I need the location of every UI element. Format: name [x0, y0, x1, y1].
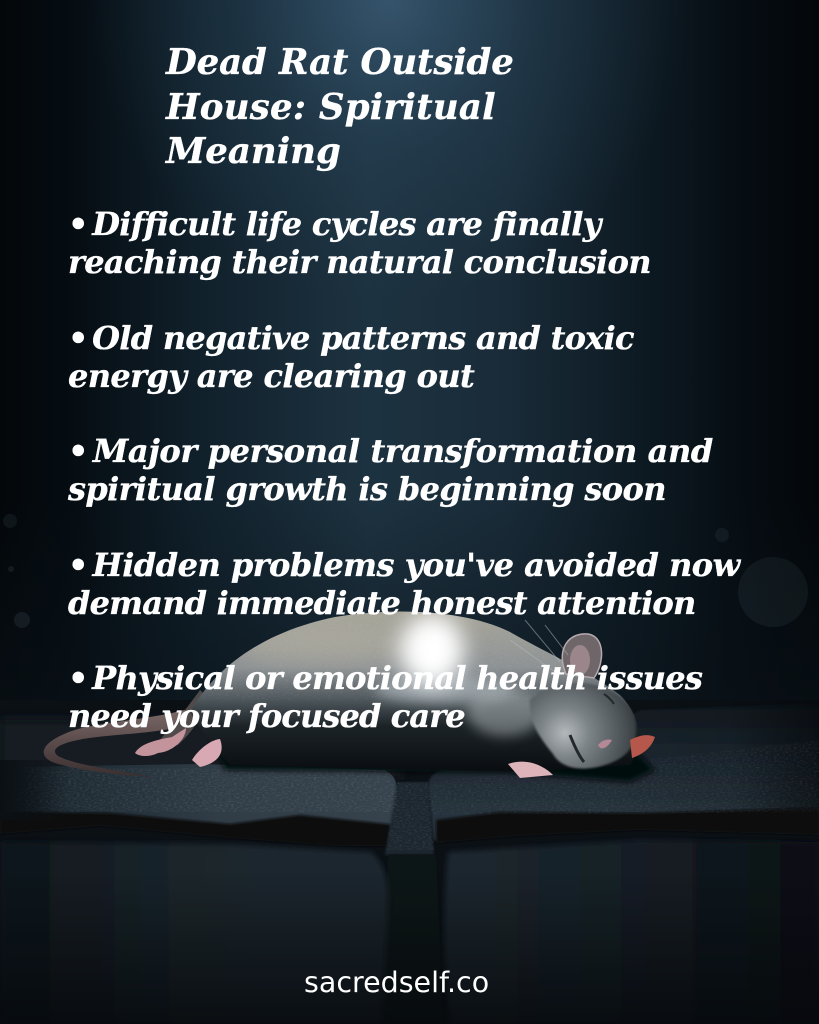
- bullet 1: • Difficult life cycles are finally: [68, 205, 601, 243]
- hind paw: [135, 728, 186, 756]
- bullet 5: need your focused care: [68, 697, 465, 735]
- head: [530, 683, 636, 769]
- eye: [570, 735, 584, 762]
- ear: [562, 634, 602, 678]
- bullet 4: demand immediate honest attention: [68, 584, 695, 622]
- bullet 5: • Physical or emotional health issues: [68, 659, 702, 697]
- rat shadow: [210, 735, 655, 782]
- closed eye mark: [604, 694, 614, 704]
- bullet 3: • Major personal transformation and: [68, 432, 713, 470]
- front paw: [508, 762, 553, 778]
- bullet 1: [68, 205, 651, 281]
- bullet 3: spiritual growth is beginning soon: [68, 470, 666, 508]
- bullet list: spiritual meanings: [68, 205, 742, 735]
- tail: [44, 706, 204, 777]
- bullet 2: [68, 319, 634, 395]
- bullet 2: • Old negative patterns and toxic: [68, 319, 634, 357]
- paving stones: [0, 700, 819, 1024]
- bokeh dots: [3, 514, 808, 628]
- footer website: sacredself.co: [304, 966, 489, 999]
- title: [164, 42, 514, 172]
- bullet 5: [68, 659, 702, 735]
- title: House: Spiritual: [166, 86, 496, 128]
- title: Dead Rat Outside: [166, 42, 514, 83]
- whiskers: [510, 620, 568, 672]
- bullet 4: • Hidden problems you've avoided now: [68, 546, 740, 584]
- rear paw: [192, 739, 222, 767]
- hind leg: [150, 690, 205, 750]
- nose: [598, 740, 612, 748]
- bullet 3: [68, 432, 713, 508]
- bullet 2: energy are clearing out: [68, 357, 474, 395]
- rat: [44, 605, 655, 778]
- bullet 4: [68, 546, 742, 622]
- far ear: [630, 735, 655, 758]
- bullet 1: reaching their natural conclusion: [68, 243, 651, 281]
- title: Meaning: [166, 131, 341, 172]
- fur highlight: [208, 612, 538, 743]
- body: [190, 612, 639, 772]
